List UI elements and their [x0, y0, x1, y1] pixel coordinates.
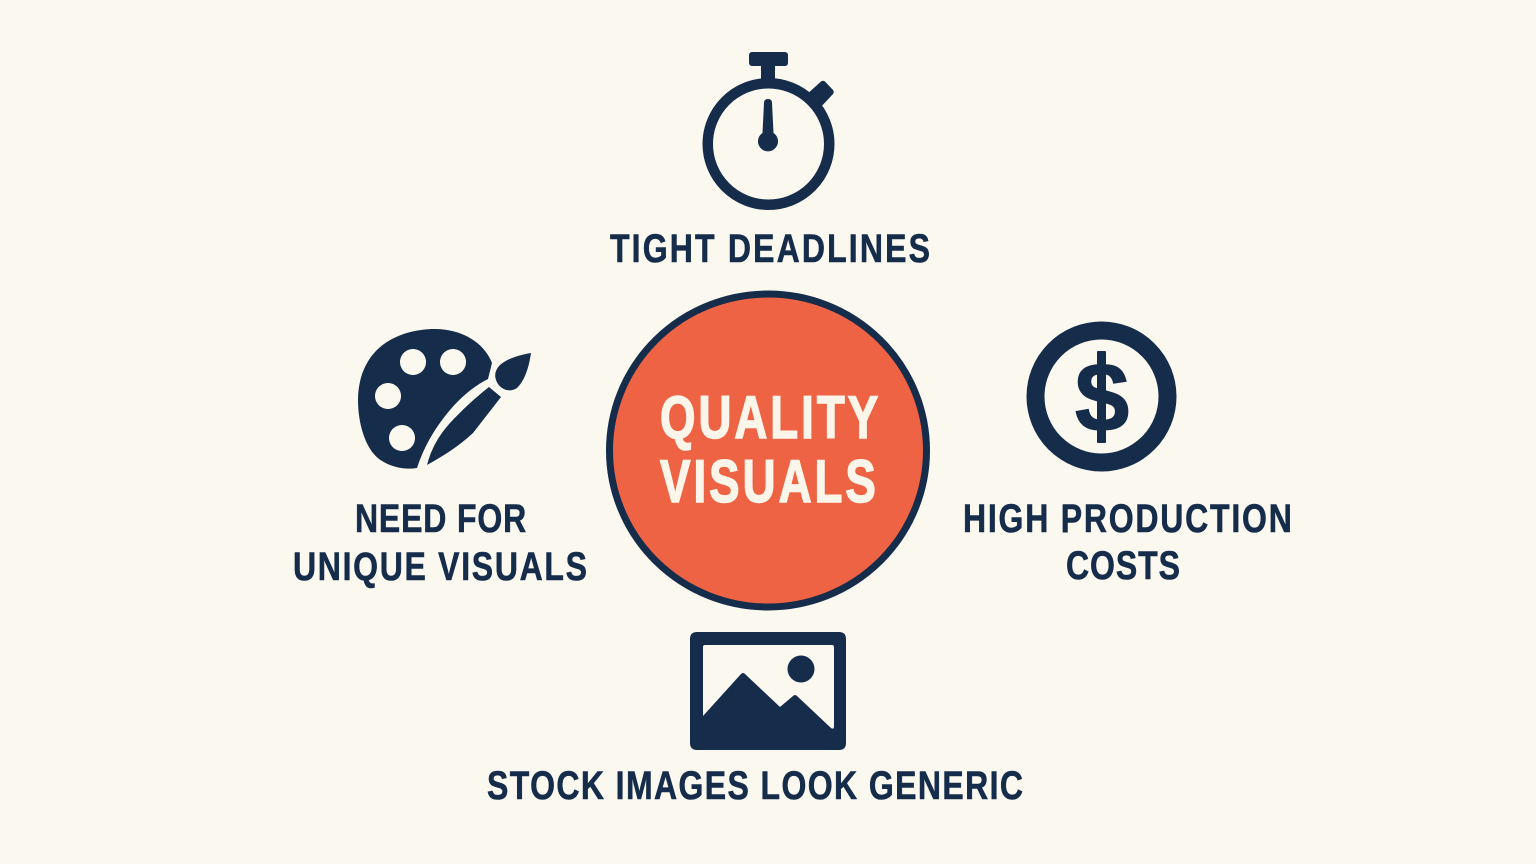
label: need for unique visuals — [293, 496, 587, 589]
label: high production costs: COSTS — [1066, 543, 1180, 588]
icon: dollar coin — [1036, 330, 1168, 462]
label: need for unique visuals: UNIQUE VISUALS — [293, 544, 587, 589]
central label line 2: VISUALS — [660, 449, 876, 516]
brush handle — [427, 387, 501, 465]
palette — [358, 329, 492, 469]
icon: stopwatch — [708, 52, 834, 205]
central label line 1: QUALITY — [660, 385, 878, 452]
label: stock images look generic: STOCK IMAGES LOOK GENERIC — [487, 763, 1023, 808]
label: high production costs — [963, 496, 1292, 588]
icon: dollar coin: $ — [1075, 342, 1129, 452]
icon: palette and brush — [358, 329, 531, 469]
brush head — [495, 353, 531, 390]
label: need for unique visuals: NEED FOR — [355, 496, 526, 541]
central circle: quality visuals — [610, 294, 926, 607]
label: high production costs: HIGH PRODUCTION — [963, 496, 1292, 541]
icon: image placeholder — [690, 632, 846, 750]
label: tight deadlines: TIGHT DEADLINES — [610, 226, 930, 271]
